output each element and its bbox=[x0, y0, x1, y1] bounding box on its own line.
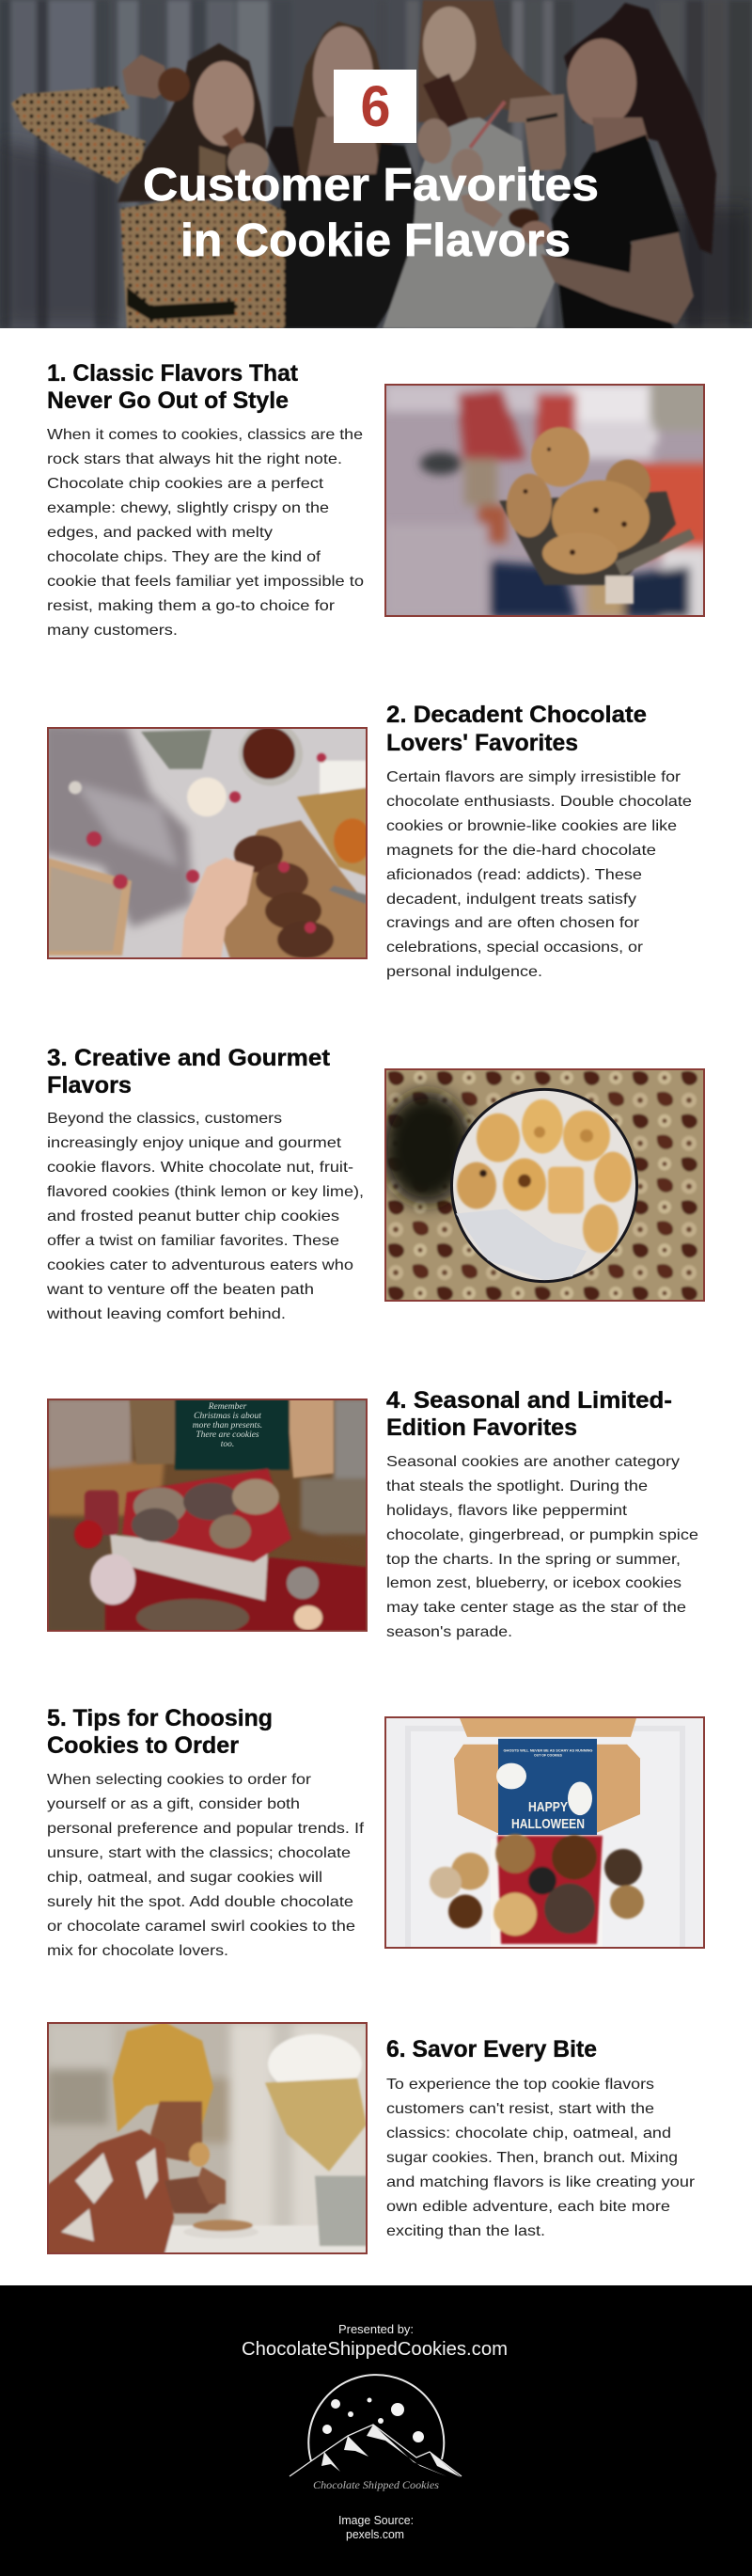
body text 6: own edible adventure, each bite more bbox=[386, 2199, 670, 2215]
body text 6: exciting than the last. bbox=[386, 2223, 545, 2239]
heading 3: 3. Creative and Gourmet bbox=[47, 1045, 331, 1071]
body text 2: magnets for the die-hard chocolate bbox=[386, 843, 656, 859]
section 1 bbox=[47, 360, 711, 639]
body text 3: and frosted peanut butter chip cookies bbox=[47, 1209, 339, 1225]
body text 2: chocolate enthusiasts. Double chocolate bbox=[386, 794, 692, 810]
photo 5: Halloween cookie box: HALLOWEEN bbox=[511, 1816, 585, 1832]
body text 1: cookie that feels familiar yet impossible to bbox=[47, 574, 364, 590]
body text 4: may take center stage as the star of the bbox=[386, 1600, 686, 1616]
heading 4: Edition Favorites bbox=[386, 1414, 577, 1441]
heading 4: 4. Seasonal and Limited- bbox=[386, 1387, 672, 1414]
photo 4: Christmas cookie gift box: too. bbox=[221, 1440, 234, 1449]
section 3 bbox=[46, 1045, 705, 1322]
hero photo: four women eating cookies bbox=[0, 0, 752, 328]
photo 4: Christmas cookie gift box: Christmas is about bbox=[194, 1412, 261, 1421]
photo 1: basket of chocolate chip cookies bbox=[384, 379, 711, 623]
photo 5: Halloween cookie box bbox=[384, 1716, 705, 1950]
main title: Customer Favorites bbox=[143, 160, 599, 211]
photo 5: Halloween cookie box: GHOSTS WILL NEVER BE AS SCARY AS RUNNING bbox=[504, 1749, 593, 1753]
body text 5: surely hit the spot. Add double chocolate bbox=[47, 1894, 353, 1910]
logo: cookie and mountains bbox=[290, 2375, 462, 2491]
body text 3: without leaving comfort behind. bbox=[46, 1306, 286, 1322]
image source credit bbox=[338, 2513, 414, 2541]
body text 4: season's parade. bbox=[386, 1624, 512, 1640]
body text 3: cookies cater to adventurous eaters who bbox=[47, 1257, 353, 1273]
heading 5: Cookies to Order bbox=[47, 1732, 239, 1759]
body text 1: Chocolate chip cookies are a perfect bbox=[47, 476, 324, 492]
body text 4 bbox=[386, 1454, 698, 1640]
footer bbox=[0, 2285, 752, 2576]
body text 5: personal preference and popular trends. If bbox=[47, 1821, 365, 1837]
body text 5: mix for chocolate lovers. bbox=[47, 1943, 228, 1959]
heading 5: 5. Tips for Choosing bbox=[47, 1705, 273, 1731]
body text 2: cravings and are often chosen for bbox=[386, 915, 640, 931]
woman 3 bbox=[418, 0, 564, 122]
body text 4: that steals the spotlight. During the bbox=[386, 1478, 648, 1494]
body text 2: aficionados (read: addicts). These bbox=[386, 867, 642, 883]
body text 1: edges, and packed with melty bbox=[47, 525, 273, 541]
photo 4: Christmas cookie gift box: Remember bbox=[208, 1402, 247, 1412]
woman 1 bbox=[118, 43, 266, 202]
body text 1: rock stars that always hit the right note. bbox=[47, 451, 342, 467]
website name: ChocolateShippedCookies.com bbox=[242, 2339, 508, 2360]
photo 5: Halloween cookie box: OUT OF COOKIES bbox=[534, 1754, 563, 1758]
body text 5 bbox=[47, 1772, 365, 1959]
arm of woman 3 over shoulder bbox=[508, 94, 566, 171]
body text 5: chip, oatmeal, and sugar cookies will bbox=[47, 1870, 322, 1886]
heading 2 bbox=[386, 702, 647, 756]
body text 1: chocolate chips. They are the kind of bbox=[47, 549, 321, 565]
body text 1: many customers. bbox=[47, 623, 178, 639]
section 2 bbox=[42, 702, 692, 980]
body text 3: increasingly enjoy unique and gourmet bbox=[47, 1135, 342, 1151]
body text 6: classics: chocolate chip, oatmeal, and bbox=[386, 2126, 671, 2141]
main title bbox=[143, 160, 599, 266]
heading 3: Flavors bbox=[47, 1072, 132, 1098]
heading 6: 6. Savor Every Bite bbox=[386, 2036, 597, 2062]
body text 5: When selecting cookies to order for bbox=[47, 1772, 312, 1788]
photo 5: Halloween cookie box: HAPPY bbox=[528, 1799, 568, 1815]
body text 5: unsure, start with the classics; chocolate bbox=[47, 1845, 351, 1861]
body text 4: holidays, flavors like peppermint bbox=[386, 1503, 628, 1519]
body text 5: yourself or as a gift, consider both bbox=[47, 1796, 300, 1812]
body text 3: cookie flavors. White chocolate nut, fruit- bbox=[47, 1160, 353, 1176]
photo 2: hand picking chocolate cookies bbox=[42, 722, 371, 959]
body text 6: To experience the top cookie flavors bbox=[386, 2077, 654, 2093]
body text 4: top the charts. In the spring or summer, bbox=[386, 1552, 681, 1568]
body text 3 bbox=[46, 1111, 364, 1322]
body text 1 bbox=[47, 427, 364, 639]
section 4 bbox=[47, 1387, 698, 1640]
heading 1: 1. Classic Flavors That bbox=[47, 360, 299, 387]
heading 3 bbox=[47, 1045, 331, 1098]
body text 3: flavored cookies (think lemon or key lime), bbox=[47, 1184, 364, 1200]
body text 6 bbox=[386, 2077, 696, 2239]
body text 2: decadent, indulgent treats satisfy bbox=[386, 892, 636, 908]
presented by: Presented by: bbox=[338, 2322, 414, 2336]
heading 1 bbox=[47, 360, 299, 414]
heading 4 bbox=[386, 1387, 672, 1441]
body text 6: customers can't resist, start with the bbox=[386, 2101, 654, 2117]
body text 4: lemon zest, blueberry, or icebox cookies bbox=[386, 1575, 682, 1591]
heading 2: 2. Decadent Chocolate bbox=[386, 702, 647, 728]
heading 2: Lovers' Favorites bbox=[386, 730, 578, 756]
section 5 bbox=[47, 1705, 705, 1959]
number badge: 6 bbox=[361, 74, 391, 138]
photo 4: Christmas cookie gift box bbox=[47, 1399, 371, 1636]
body text 3: want to venture off the beaten path bbox=[46, 1282, 314, 1298]
image source credit: Image Source: bbox=[338, 2513, 414, 2527]
heading 1: Never Go Out of Style bbox=[47, 387, 289, 414]
logo wordmark: Chocolate Shipped Cookies bbox=[313, 2478, 439, 2491]
body text 2: celebrations, special occasions, or bbox=[386, 940, 644, 956]
hero banner bbox=[0, 0, 752, 329]
woman 2 bbox=[287, 22, 395, 179]
body text 5: or chocolate caramel swirl cookies to the bbox=[47, 1919, 355, 1935]
body text 3: Beyond the classics, customers bbox=[47, 1111, 282, 1127]
photo 6: woman eating a cookie bbox=[47, 2022, 371, 2258]
body text 4: Seasonal cookies are another category bbox=[386, 1454, 680, 1470]
body text 2: cookies or brownie-like cookies are like bbox=[386, 818, 677, 834]
body text 2 bbox=[386, 769, 692, 980]
body text 4: chocolate, gingerbread, or pumpkin spice bbox=[386, 1527, 698, 1543]
body text 2: personal indulgence. bbox=[386, 964, 542, 980]
number badge bbox=[334, 70, 416, 143]
body text 6: sugar cookies. Then, branch out. Mixing bbox=[386, 2150, 678, 2166]
body text 1: resist, making them a go-to choice for bbox=[47, 598, 336, 614]
body text 6: and matching flavors is like creating your bbox=[386, 2174, 696, 2190]
photo 4: Christmas cookie gift box: There are cookies bbox=[196, 1430, 259, 1440]
main title: in Cookie Flavors bbox=[180, 215, 571, 266]
photo 4: Christmas cookie gift box: more than presents. bbox=[193, 1421, 262, 1430]
body text 3: offer a twist on familiar favorites. These bbox=[47, 1233, 339, 1249]
body text 1: example: chewy, slightly crispy on the bbox=[47, 500, 329, 516]
body text 1: When it comes to cookies, classics are the bbox=[47, 427, 363, 443]
photo 3: tin of butter cookies on lace bbox=[382, 1068, 705, 1302]
heading 5 bbox=[47, 1705, 273, 1759]
image source credit: pexels.com bbox=[346, 2527, 404, 2541]
woman 4 bbox=[564, 3, 716, 254]
section 6 bbox=[47, 2022, 696, 2258]
body text 2: Certain flavors are simply irresistible for bbox=[386, 769, 682, 785]
